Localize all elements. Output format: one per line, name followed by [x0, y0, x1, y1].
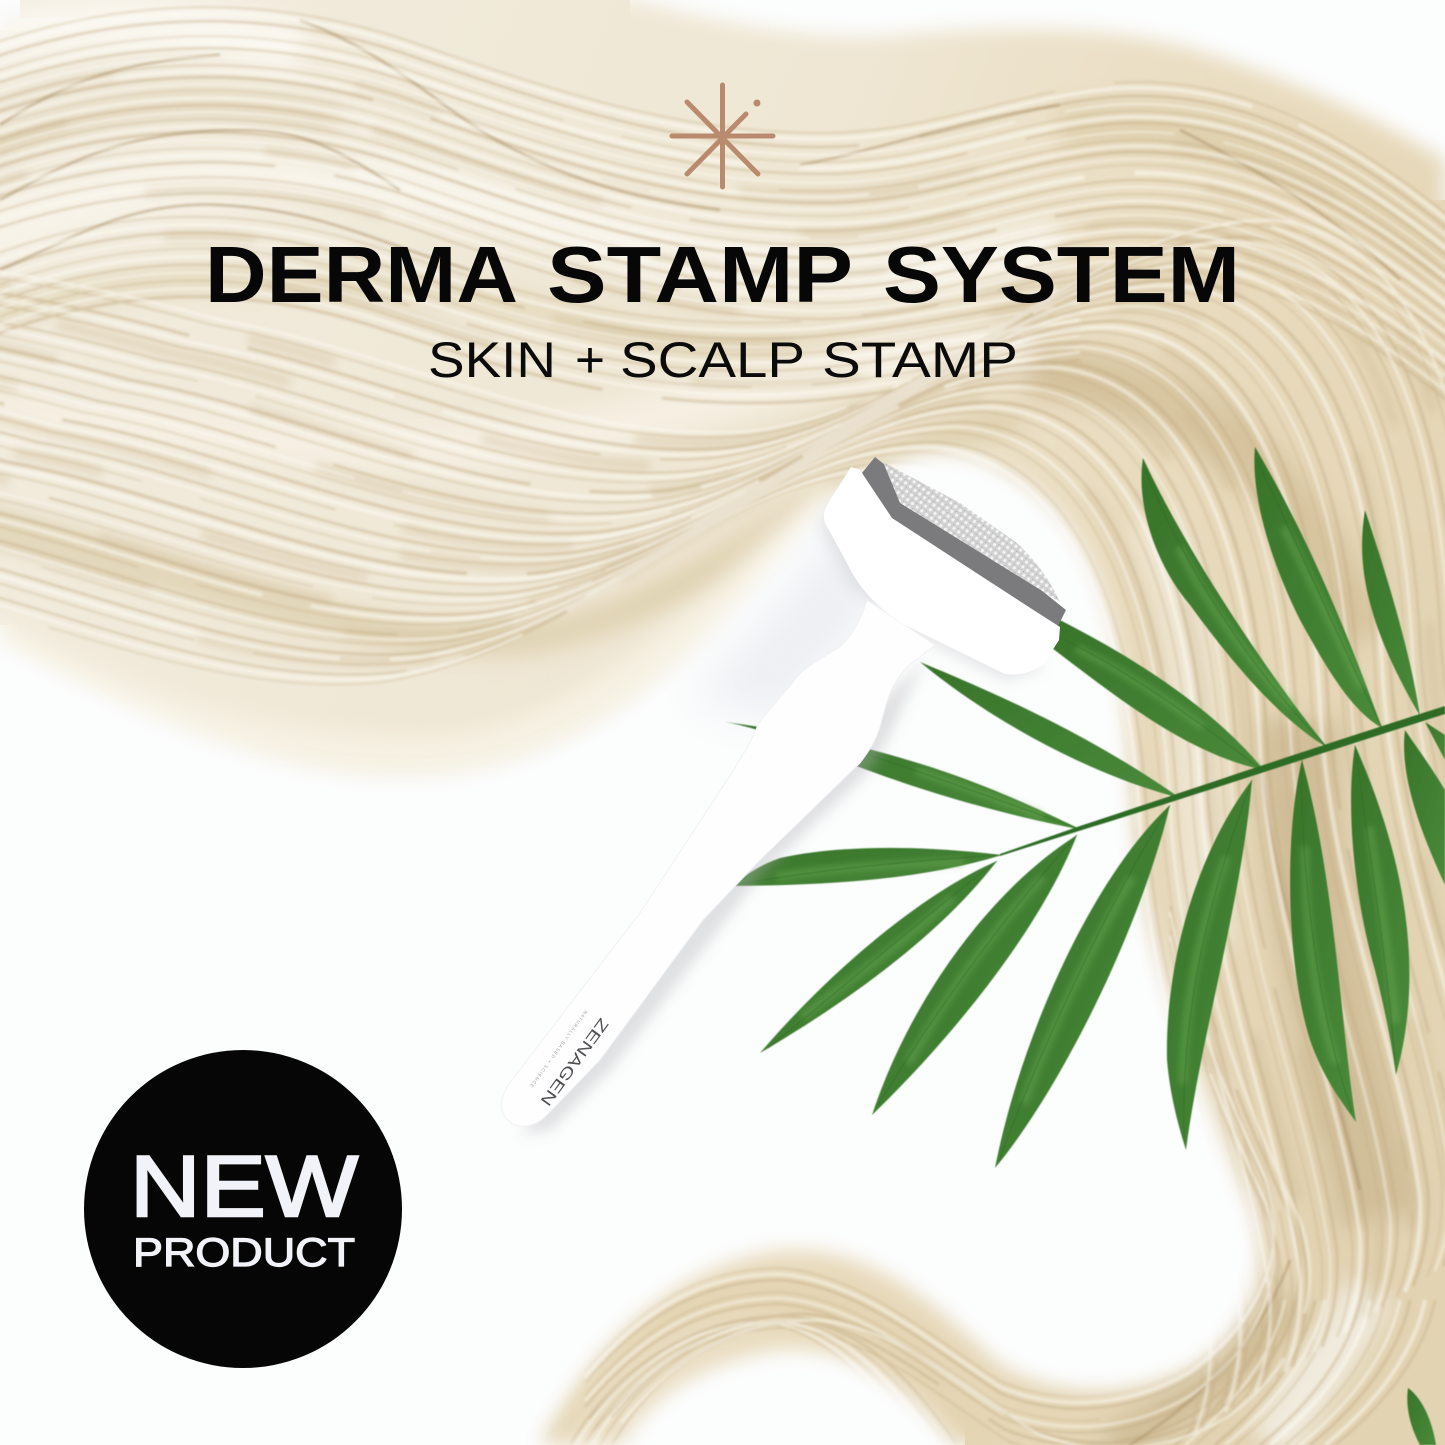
- title: SYSTEM: [883, 230, 1240, 319]
- title: STAMP: [547, 230, 853, 319]
- title: DERMA: [205, 230, 518, 319]
- subtitle: SKIN: [428, 332, 556, 388]
- badge word new: NEW: [130, 1139, 358, 1235]
- badge circle: [84, 1050, 402, 1368]
- subtitle: STAMP: [822, 332, 1018, 388]
- icon: starburst logo: [672, 85, 773, 187]
- pocket shading near stamp: [690, 510, 880, 720]
- title: [205, 230, 1240, 319]
- stamp head grey base: [862, 457, 1066, 626]
- frond stem: [1000, 706, 1445, 856]
- stamp needle plate: [883, 462, 1060, 602]
- bottom right leaf: [1407, 1388, 1436, 1445]
- leaflet highlights: [780, 530, 1395, 1100]
- subtitle: [428, 332, 1018, 388]
- derma stamp tool: [501, 457, 1066, 1134]
- head shadow: [820, 500, 1045, 680]
- brand tagline: NATURALLY BASED + SCIENCE: [529, 1009, 588, 1088]
- badge word product: PRODUCT: [133, 1231, 355, 1275]
- subtitle: SCALP: [620, 332, 805, 388]
- handle shadow: [520, 655, 930, 1134]
- leaflet veins: [740, 460, 1395, 1158]
- stamp head white: [824, 467, 1060, 674]
- leaflets: [725, 447, 1445, 1445]
- badge: new product: [84, 1050, 402, 1368]
- brand name: ZENAGEN: [537, 1015, 612, 1109]
- palm frond: [725, 447, 1445, 1445]
- subtitle: +: [575, 332, 605, 388]
- handle: [501, 600, 935, 1126]
